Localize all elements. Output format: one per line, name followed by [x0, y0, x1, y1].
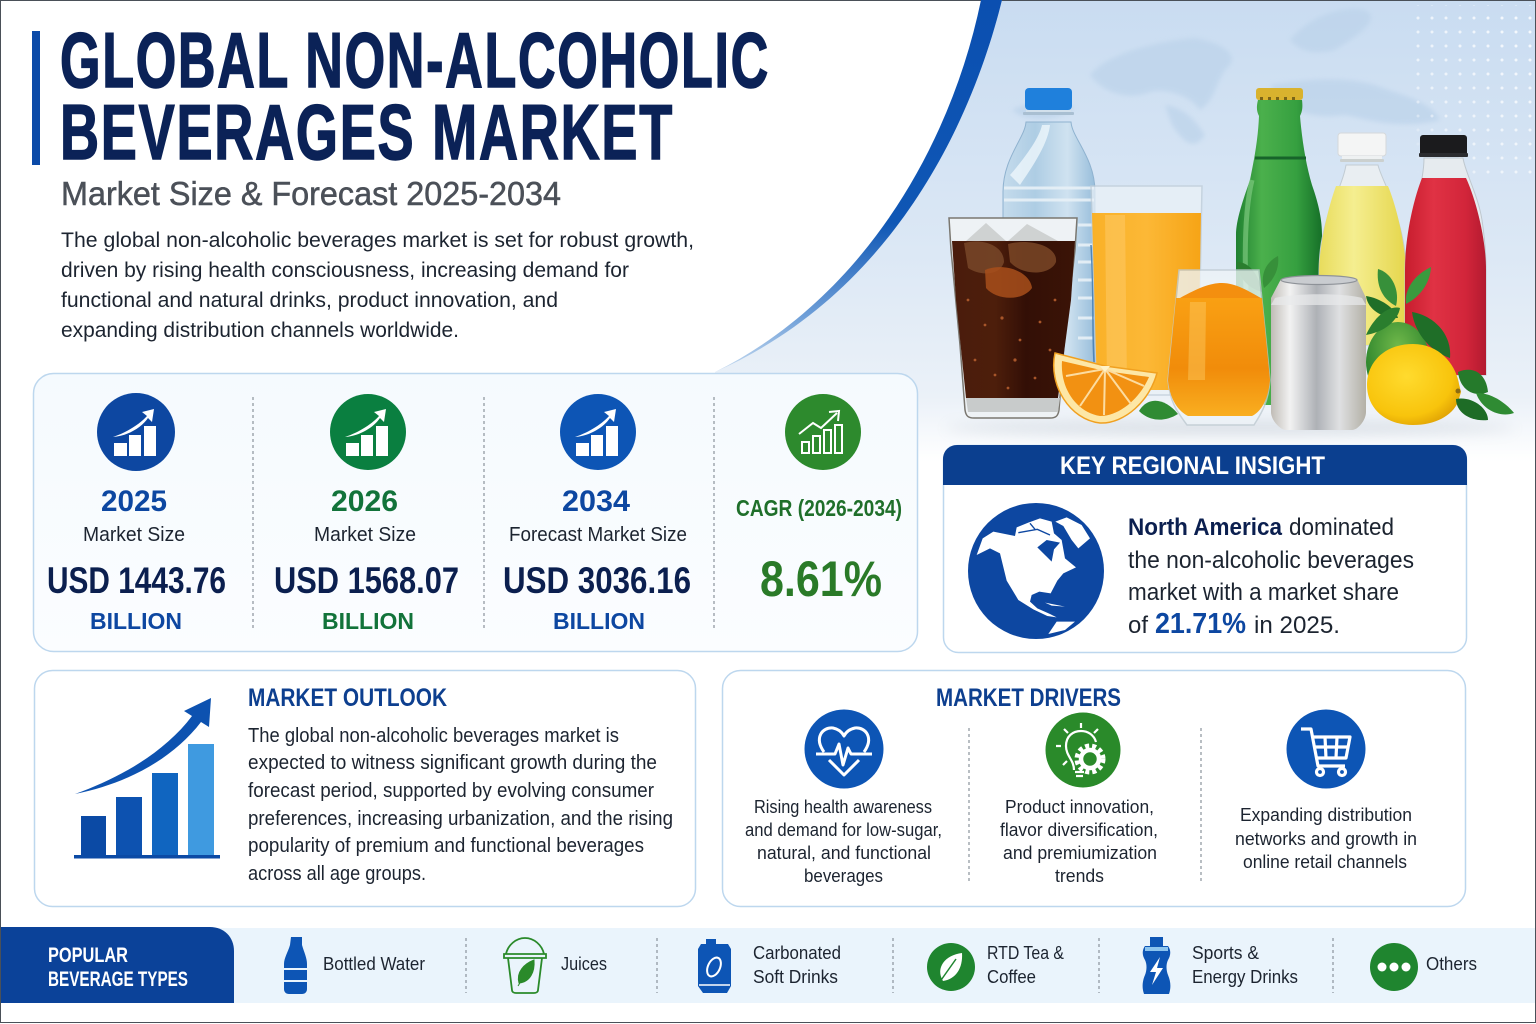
- driver text: distribution: online retail channels: [1243, 852, 1407, 872]
- item: others: Others: [1426, 954, 1477, 974]
- driver text: innovation: [1000, 797, 1158, 886]
- popular beverage types strip: [1, 927, 1535, 1003]
- intro paragraph: driven by rising health consciousness, increasing demand for: [61, 259, 629, 282]
- item: carbonated soft drinks: Carbonated: [753, 943, 841, 963]
- insight text: of: [1128, 612, 1148, 639]
- stat: CAGR: CAGR (2026-2034): [736, 495, 902, 521]
- lime: [1366, 322, 1430, 402]
- panel: key regional insight: [943, 445, 1467, 652]
- header text: KEY REGIONAL INSIGHT: [1060, 452, 1325, 480]
- driver text: health: natural, and functional: [757, 843, 931, 863]
- insight text: North America: [1128, 514, 1283, 541]
- stat: 2026: BILLION: [322, 608, 414, 634]
- item: juices: Juices: [561, 954, 607, 974]
- green glass bottle: [1236, 88, 1322, 405]
- water bottle: [1003, 88, 1095, 365]
- item: carbonated soft drinks: [698, 939, 841, 993]
- intro paragraph: The global non-alcoholic beverages market is set for robust growth,: [61, 229, 694, 252]
- intro paragraph: expanding distribution channels worldwide.: [61, 319, 459, 342]
- stat: 2025: Market Size: [83, 524, 185, 546]
- yellow juice bottle: [1319, 133, 1406, 345]
- panel: market drivers: [722, 670, 1466, 906]
- item: bottled water: [284, 937, 425, 994]
- title: BEVERAGES MARKET: [60, 88, 674, 176]
- stat: CAGR: 8.61%: [760, 551, 882, 607]
- icon: heart with pulse: [804, 710, 884, 788]
- paragraph: expected to witness significant growth during the: [248, 752, 657, 774]
- paragraph: [248, 725, 673, 885]
- header band: [943, 445, 1467, 485]
- paragraph: The global non-alcoholic beverages market is: [248, 725, 619, 747]
- insight text: in 2025.: [1254, 612, 1340, 639]
- driver text: distribution: networks and growth in: [1235, 829, 1417, 849]
- item: sports and energy drinks: Sports &: [1192, 943, 1259, 963]
- orange wedge: [1054, 353, 1157, 423]
- strip label tab: [1, 927, 234, 1003]
- bar chart with growth arrow: [74, 698, 220, 858]
- driver text: innovation: Product innovation,: [1005, 797, 1154, 817]
- title: GLOBAL NON-ALCOHOLIC: [60, 16, 770, 104]
- item: rtd tea and coffee: [927, 943, 1064, 991]
- paragraph: forecast period, supported by evolving consumer: [248, 780, 654, 802]
- stat: 2025: BILLION: [90, 608, 182, 634]
- intro paragraph: [61, 229, 694, 342]
- icon: globe: [968, 503, 1104, 639]
- stat: 2025: 2025: [101, 485, 167, 518]
- panel: market outlook: [34, 670, 696, 906]
- driver text: innovation: and premiumization: [1003, 843, 1157, 863]
- stat: 2026: Market Size: [314, 524, 416, 546]
- driver text: distribution: Expanding distribution: [1240, 805, 1412, 825]
- stat: 2025: USD 1443.76: [47, 560, 226, 601]
- small orange juice glass: [1168, 270, 1270, 425]
- cola glass with ice: [949, 218, 1077, 418]
- stat: 2034: Forecast Market Size: [509, 524, 687, 546]
- mint leaves behind can: [1237, 256, 1450, 358]
- item: sports and energy drinks: Energy Drinks: [1192, 967, 1298, 987]
- driver text: health: and demand for low-sugar,: [745, 820, 942, 840]
- icon: lightbulb and gear: [1046, 712, 1120, 788]
- stat: 2034: USD 3036.16: [503, 560, 691, 601]
- panel: market size stats: [34, 374, 918, 652]
- heading: MARKET DRIVERS: [936, 684, 1121, 712]
- item: juices: [504, 938, 607, 993]
- item: others: [1370, 943, 1477, 991]
- red drink bottle: [1405, 135, 1486, 375]
- item: carbonated soft drinks: Soft Drinks: [753, 967, 838, 987]
- strip label tab: BEVERAGE TYPES: [48, 968, 188, 991]
- insight text: the non-alcoholic beverages: [1128, 547, 1414, 574]
- stat: 2026: 2026: [331, 485, 398, 518]
- stat: 2025: [47, 393, 226, 634]
- stat: 2034: [503, 394, 691, 634]
- driver text: innovation: flavor diversification,: [1000, 820, 1158, 840]
- insight text: market with a market share: [1128, 579, 1399, 606]
- title: [60, 16, 770, 176]
- paragraph: popularity of premium and functional beverages: [248, 835, 644, 857]
- heading: MARKET OUTLOOK: [248, 684, 447, 712]
- driver text: health: [745, 797, 942, 886]
- mint leaves front: [1139, 370, 1514, 420]
- intro paragraph: functional and natural drinks, product innovation, and: [61, 289, 558, 312]
- insight text: dominated: [1289, 514, 1394, 541]
- strip label tab: POPULAR: [48, 944, 128, 967]
- stat: 2034: BILLION: [553, 608, 645, 634]
- hero background with swoosh: [715, 0, 1535, 462]
- silver can: [1271, 276, 1366, 430]
- tall juice glass: [1091, 186, 1202, 395]
- paragraph: across all age groups.: [248, 863, 426, 885]
- driver text: distribution: [1235, 805, 1417, 872]
- stat: CAGR: [736, 394, 902, 607]
- stat: 2026: USD 1568.07: [274, 560, 459, 601]
- subtitle: Market Size & Forecast 2025-2034: [61, 175, 561, 212]
- stat: 2034: 2034: [562, 485, 630, 518]
- paragraph: preferences, increasing urbanization, and the rising: [248, 808, 673, 830]
- stat: 2026: [274, 394, 459, 634]
- item: bottled water: Bottled Water: [323, 954, 425, 974]
- insight text: [1128, 514, 1414, 640]
- title accent bar: [32, 31, 40, 165]
- item: rtd tea and coffee: RTD Tea &: [987, 943, 1064, 963]
- item: sports and energy drinks: [1143, 937, 1298, 994]
- insight text: 21.71%: [1155, 608, 1246, 640]
- lemon: [1367, 344, 1461, 425]
- icon: shopping cart: [1286, 710, 1366, 788]
- driver text: health: beverages: [804, 866, 883, 886]
- item: rtd tea and coffee: Coffee: [987, 967, 1036, 987]
- beverage product group: [945, 88, 1515, 435]
- driver text: health: Rising health awareness: [754, 797, 932, 817]
- driver text: innovation: trends: [1055, 866, 1104, 886]
